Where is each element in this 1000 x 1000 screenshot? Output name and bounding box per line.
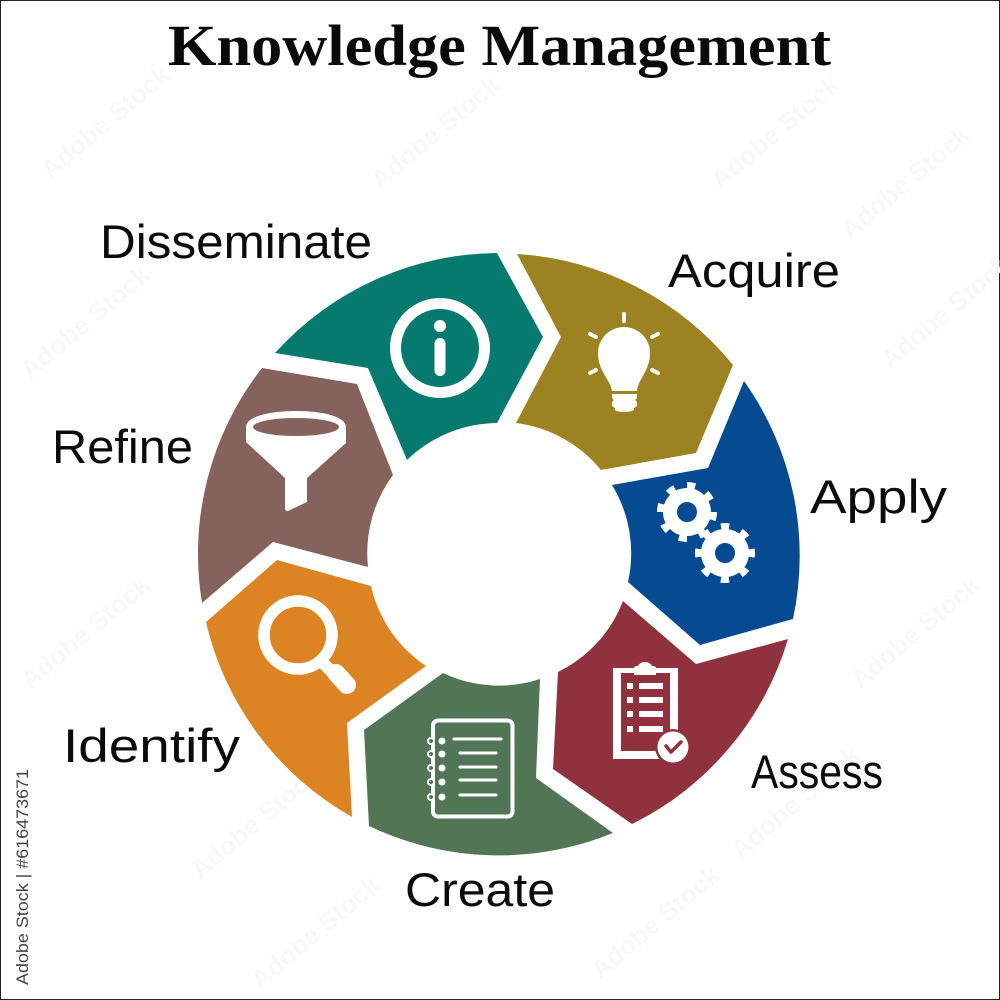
text: Adobe Stock (35, 59, 176, 185)
icon: magnifying glass (264, 601, 347, 685)
title: Knowledge Management (168, 13, 832, 78)
label: refine: Refine (52, 420, 193, 473)
label: acquire: Acquire (668, 244, 840, 297)
panel: assess segment (553, 601, 788, 824)
panel: create segment (364, 673, 613, 855)
icon: notebook (428, 720, 512, 816)
icon: gears (661, 486, 751, 579)
icon: information (396, 304, 484, 392)
label: create: Create (405, 863, 555, 916)
text: Adobe Stock (585, 859, 726, 985)
icon: light bulb (590, 314, 658, 412)
text: Adobe Stock (725, 739, 866, 865)
stock credit: Adobe Stock | #616473671 (13, 769, 32, 985)
label: disseminate: Disseminate (100, 215, 372, 268)
panel: acquire segment (516, 254, 733, 470)
panel: apply segment (612, 381, 800, 645)
panel: identify segment (206, 560, 426, 817)
icon: clipboard checklist (613, 662, 691, 765)
text: Adobe Stock (365, 69, 506, 195)
label: assess: Assess (751, 745, 883, 798)
text: Adobe Stock (835, 119, 976, 245)
label: identify: Identify (63, 719, 241, 772)
text: Adobe Stock (705, 69, 846, 195)
text: Adobe Stock (15, 259, 156, 385)
panel: refine segment (198, 368, 393, 603)
label: apply: Apply (810, 470, 948, 523)
icon: funnel (246, 411, 346, 511)
text: Adobe Stock (15, 569, 156, 695)
panel: disseminate segment (275, 253, 543, 460)
text: Adobe Stock (845, 569, 986, 695)
text: Adobe Stock (185, 759, 326, 885)
text: Adobe Stock (245, 869, 386, 995)
